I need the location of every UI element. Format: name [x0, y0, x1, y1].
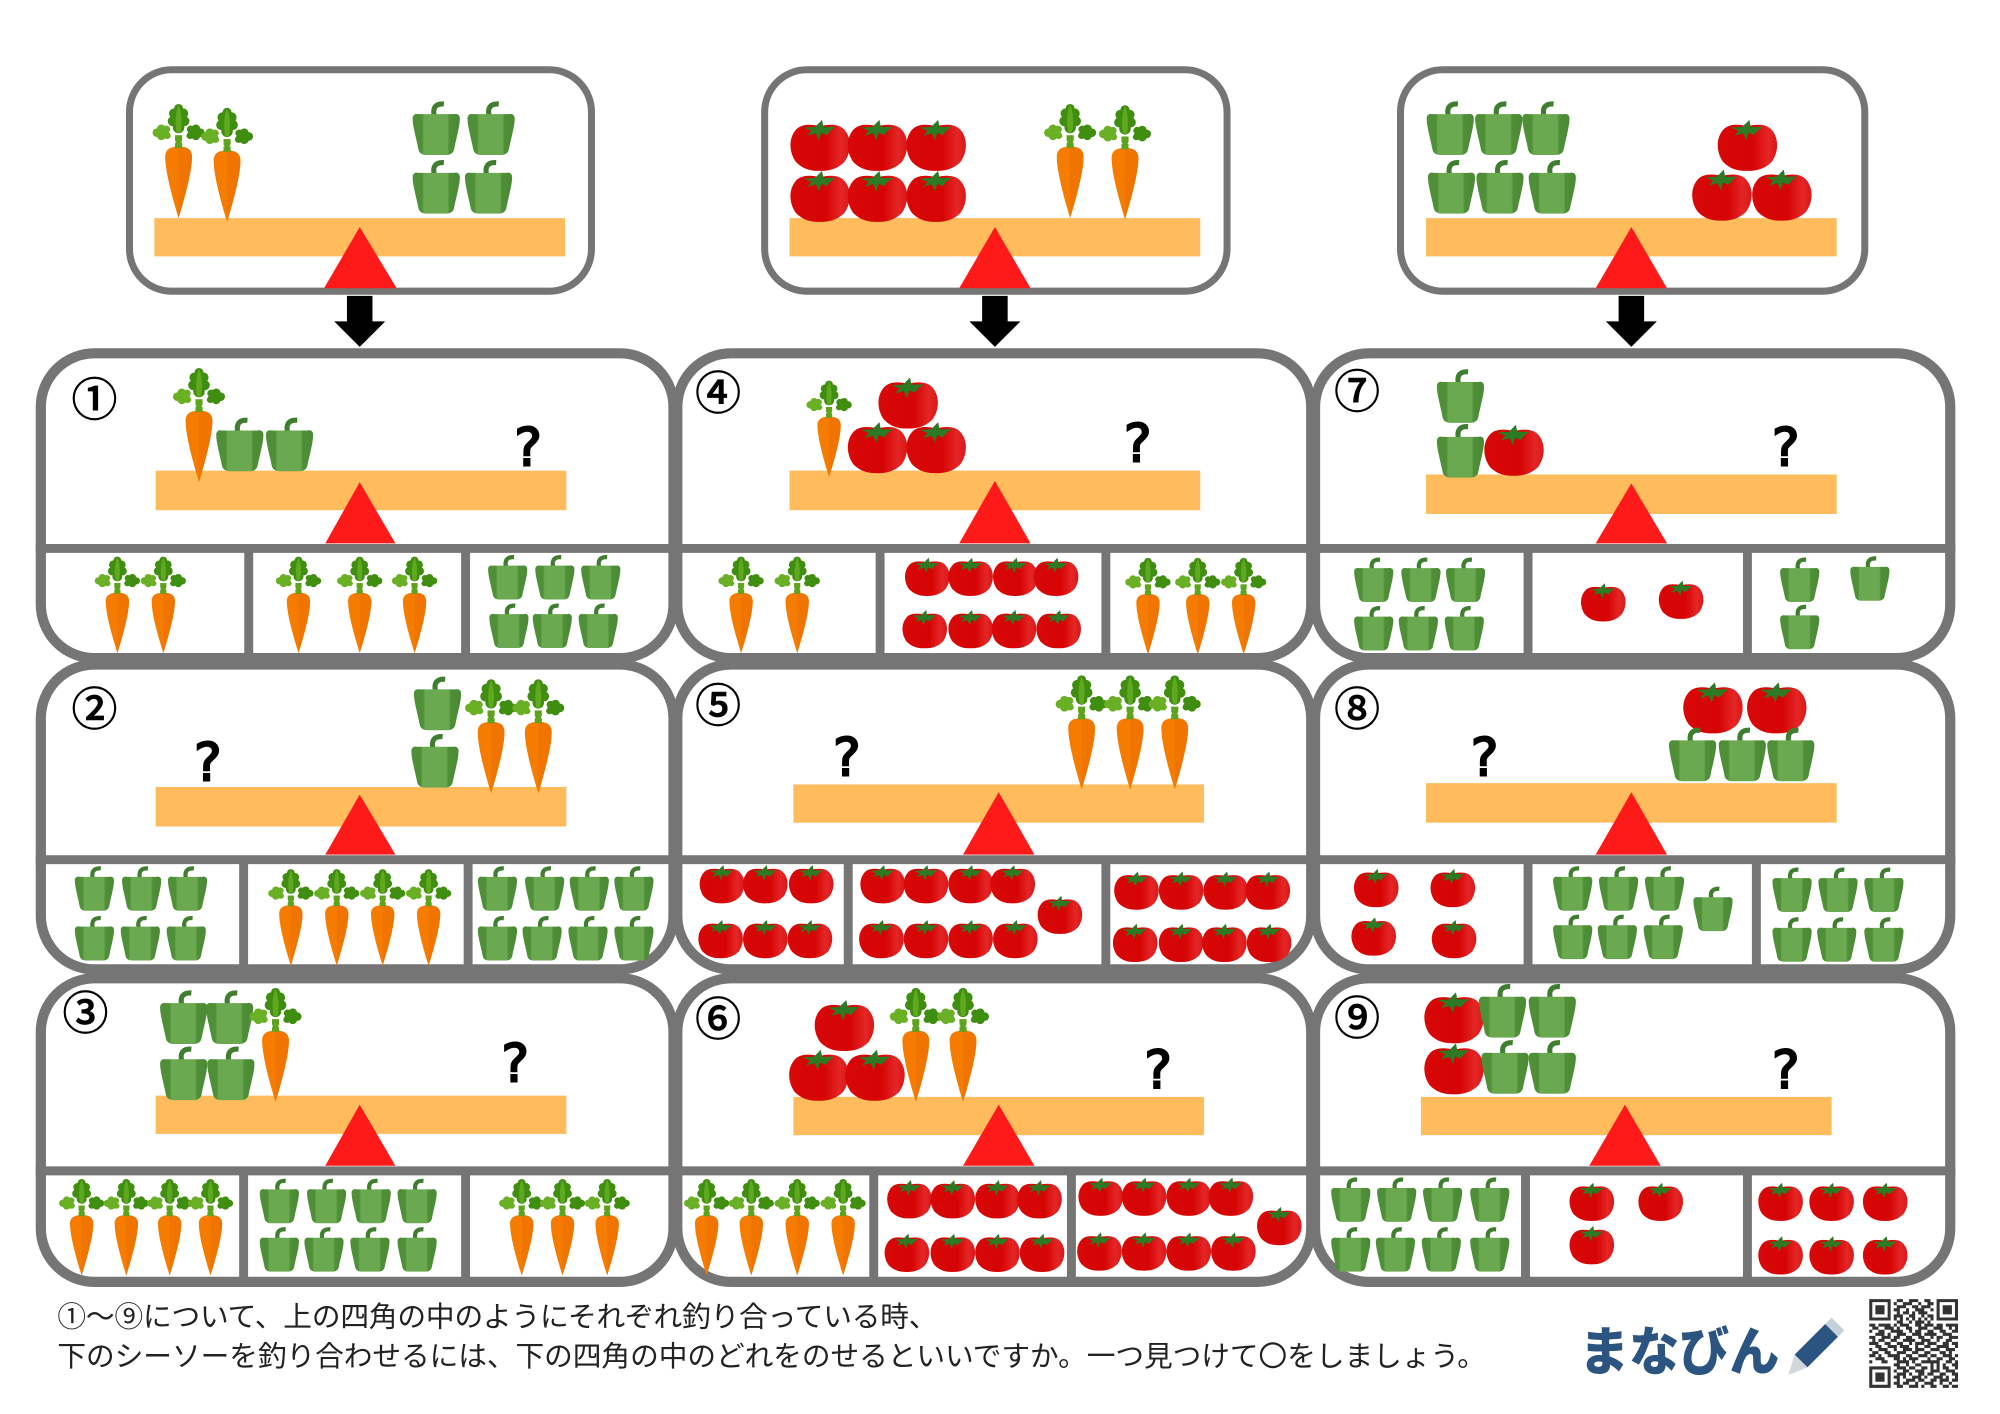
- question mark: ?: [194, 733, 222, 794]
- rounded frame with dividers: [36, 665, 679, 969]
- icon: two peppers and two carrots: [411, 679, 564, 793]
- rounded frame with dividers: [36, 353, 679, 658]
- answer option: six peppers: [1354, 560, 1485, 651]
- question mark: ?: [514, 418, 542, 479]
- answer option: eight tomatoes: [885, 1180, 1064, 1272]
- number: ⑦: [1334, 366, 1380, 418]
- seesaw: [1426, 218, 1837, 288]
- seesaw: [790, 471, 1200, 543]
- rounded frame with dividers: [672, 978, 1316, 1282]
- number: ⑧: [1334, 684, 1380, 736]
- rounded frame with dividers: [1310, 353, 1955, 658]
- rounded frame: [1401, 70, 1865, 291]
- answer option: eight tomatoes: [1113, 871, 1291, 962]
- icon: three tomatoes and two carrots: [789, 988, 989, 1102]
- seesaw: [790, 218, 1200, 288]
- icon: six tomatoes: [790, 120, 966, 222]
- answer option: two carrots: [718, 557, 820, 653]
- icon: four green peppers: [413, 104, 515, 214]
- icon: pencil: [1788, 1318, 1844, 1375]
- answer option: two tomatoes: [1581, 581, 1703, 621]
- rounded frame with dividers: [1310, 978, 1955, 1282]
- arrow: down to panels 1-3: [334, 296, 385, 347]
- answer option: six peppers: [75, 868, 207, 960]
- panel: question 5: [672, 665, 1316, 969]
- answer option: six tomatoes: [1758, 1183, 1907, 1275]
- icon: carrot and three tomatoes: [806, 378, 966, 477]
- rounded frame with dividers: [672, 353, 1316, 658]
- panel: question 9: [1310, 978, 1955, 1282]
- icon: three carrots: [1056, 675, 1201, 790]
- arrow: down to panels 4-6: [969, 296, 1020, 347]
- number: ①: [71, 374, 117, 426]
- number: ⑨: [1334, 992, 1380, 1044]
- answer option: six tomatoes: [698, 865, 834, 958]
- number: ②: [71, 684, 117, 736]
- arrow: down to panels 7-9: [1606, 296, 1657, 347]
- panel: question 6: [672, 978, 1316, 1282]
- icon: carrot and two peppers: [173, 368, 313, 482]
- icon: two carrots: [1044, 104, 1151, 219]
- rounded frame: [765, 70, 1227, 291]
- panel: top example balance 3: [1401, 70, 1865, 291]
- seesaw: [1426, 474, 1837, 543]
- QR code: [1869, 1299, 1958, 1388]
- answer option: four carrots: [59, 1179, 233, 1276]
- answer option: four carrots: [684, 1179, 866, 1276]
- question mark: ?: [1772, 418, 1800, 479]
- answer option: eight peppers: [260, 1181, 437, 1272]
- answer option: three carrots: [1125, 558, 1266, 654]
- panel: top example balance 2: [765, 70, 1227, 291]
- panel: question 1: [36, 353, 679, 658]
- icon: two tomatoes and four peppers: [1424, 987, 1576, 1094]
- answer option: nine tomatoes: [859, 865, 1082, 958]
- icon: two tomatoes and three peppers: [1669, 682, 1814, 781]
- panel: question 8: [1310, 665, 1955, 969]
- answer option: four carrots: [268, 869, 451, 966]
- instructions text: [57, 1302, 1486, 1373]
- answer option: three carrots: [276, 557, 437, 653]
- panel: top example balance 1: [129, 70, 591, 291]
- panel: question 7: [1310, 353, 1955, 658]
- rounded frame with dividers: [672, 665, 1316, 969]
- question mark: ?: [501, 1034, 529, 1095]
- icon: two peppers and tomato: [1437, 372, 1544, 478]
- question mark: ?: [1772, 1040, 1800, 1101]
- icon: three tomatoes: [1692, 120, 1812, 221]
- seesaw: [154, 218, 565, 288]
- answer option: six peppers: [488, 557, 620, 648]
- question mark: ?: [1124, 414, 1152, 475]
- answer option: eight peppers: [1331, 1180, 1509, 1272]
- answer option: nine tomatoes: [1077, 1178, 1302, 1271]
- answer option: three tomatoes: [1570, 1183, 1683, 1264]
- panel: question 4: [672, 353, 1316, 658]
- number: ⑥: [695, 994, 741, 1046]
- answer option: four tomatoes: [1351, 869, 1476, 958]
- logo: manabin: まなびん: [1579, 1324, 1779, 1382]
- answer option: six peppers: [1772, 870, 1903, 962]
- answer option: three carrots: [499, 1179, 630, 1276]
- seesaw: [156, 787, 566, 855]
- answer option: three peppers: [1780, 558, 1889, 649]
- number: ③: [63, 987, 108, 1039]
- instructions text: 下のシーソーを釣り合わせるには、下の四角の中のどれをのせるといいですか。一つ見つけて〇をしましょう。: [57, 1341, 1486, 1373]
- panel: question 2: [36, 665, 679, 969]
- seesaw: [156, 471, 566, 543]
- icon: four peppers and carrot: [160, 988, 302, 1102]
- rounded frame with dividers: [1310, 665, 1955, 969]
- panel: question 3: [36, 978, 679, 1282]
- question mark: ?: [1471, 727, 1499, 788]
- question mark: ?: [1144, 1040, 1172, 1101]
- answer option: eight peppers: [478, 868, 654, 960]
- seesaw: [156, 1096, 566, 1166]
- rounded frame with dividers: [36, 978, 679, 1282]
- number: ⑤: [695, 680, 741, 732]
- seesaw: [793, 1097, 1204, 1166]
- answer option: two carrots: [95, 557, 186, 653]
- seesaw: [1421, 1097, 1832, 1166]
- seesaw: [1426, 783, 1837, 855]
- answer option: seven peppers: [1553, 868, 1733, 959]
- icon: two carrots: [153, 104, 253, 222]
- number: ④: [695, 367, 741, 419]
- question mark: ?: [833, 727, 861, 788]
- rounded frame: [129, 70, 591, 291]
- instructions text: ①～⑨について、上の四角の中のようにそれぞれ釣り合っている時、: [57, 1302, 938, 1334]
- icon: six green peppers: [1427, 104, 1576, 214]
- seesaw: [793, 784, 1204, 855]
- answer option: eight tomatoes: [902, 558, 1081, 648]
